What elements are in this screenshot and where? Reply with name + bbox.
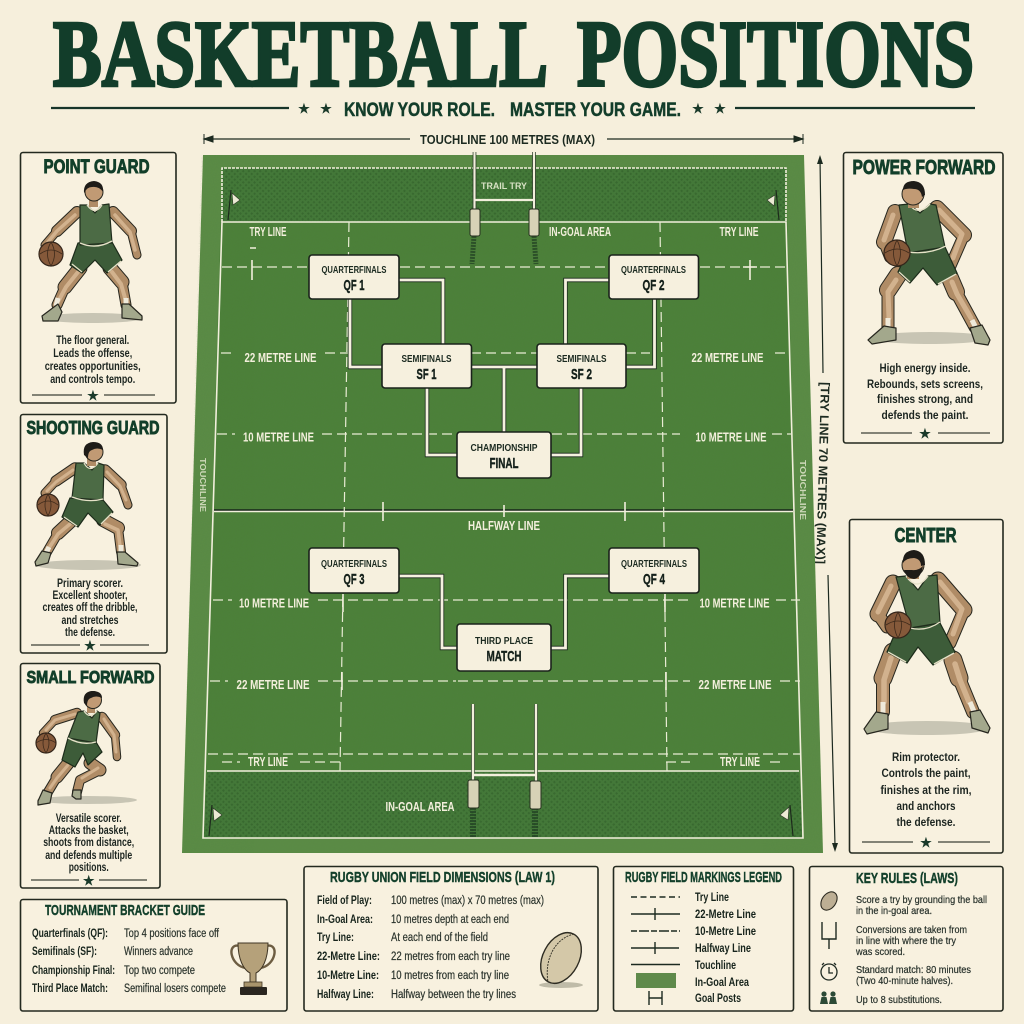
player figure: shooting guard: [35, 442, 141, 570]
panel: tournament bracket guide: Quarterfinals (QF):: [32, 928, 108, 940]
panel: key rules: Up to 8 substitutions.: [856, 994, 942, 1006]
panel: point guard: ★: [87, 388, 99, 403]
bracket box: QF 2: [609, 255, 698, 299]
panel: rugby union field dimensions: [304, 866, 598, 1011]
panel: small forward: Attacks the basket,: [49, 823, 129, 837]
panel: rugby union field dimensions: 10 metres from each try line: [391, 970, 509, 982]
panel: point guard: [20, 152, 176, 403]
panel: shooting guard: and stretches: [62, 613, 119, 627]
field labels: TRY LINE: [720, 755, 760, 769]
panel: rugby union field dimensions: Halfway Line:: [317, 989, 374, 1001]
panel: tournament bracket guide: Winners advance: [124, 946, 193, 958]
panel: center: ★: [920, 835, 932, 850]
panel: center: and anchors: [896, 799, 956, 813]
panel: small forward: and defends multiple: [45, 848, 132, 862]
bracket connectors: [350, 280, 654, 648]
field labels: 22 METRE LINE: [698, 678, 772, 692]
panel: point guard: creates opportunities,: [45, 359, 141, 373]
field labels: 10 METRE LINE: [700, 596, 770, 610]
in-goal area top: [222, 168, 786, 222]
panel: rugby union field dimensions: 100 metres (max) x 70 metres (max): [391, 895, 544, 907]
panel: rugby union field dimensions: Try Line:: [317, 932, 354, 944]
bracket box: Championship Final: CHAMPIONSHIP: [470, 442, 538, 454]
panel: small forward: shoots from distance,: [43, 835, 134, 849]
bracket box: Championship Final: [457, 432, 551, 478]
field labels: TOUCHLINE: [198, 458, 207, 513]
panel: center: [850, 520, 1003, 853]
touchline dimension arrow: [204, 132, 803, 147]
top goal posts: [470, 152, 539, 264]
panel: power forward: Rebounds, sets screens,: [867, 377, 983, 391]
panel: key rules: (Two 40-minute halves).: [856, 975, 953, 987]
bracket box: QF 2: QUARTERFINALS: [621, 264, 686, 276]
bracket box: QF 4: QF 4: [643, 571, 665, 588]
bracket box: Third Place Match: [457, 624, 551, 671]
top goal posts: TRAIL TRY: [481, 181, 527, 191]
panel: key rules: in line with where the try: [856, 935, 957, 947]
panel: shooting guard: Primary scorer.: [57, 576, 123, 590]
panel: point guard: The floor general.: [56, 333, 129, 347]
panel: power forward: High energy inside.: [880, 361, 970, 375]
panel: small forward: Versatile scorer.: [56, 811, 122, 825]
panel: rugby union field dimensions: 22 metres from each try line: [391, 951, 510, 963]
panel: center: the defense.: [896, 815, 956, 829]
bracket box: SF 1: SEMIFINALS: [402, 353, 452, 365]
title: [53, 2, 974, 106]
subtitle tagline: ★: [298, 101, 310, 116]
bracket box: QF 1: QF 1: [344, 277, 364, 294]
panel: point guard: Leads the offense,: [53, 346, 132, 360]
panel: power forward: [844, 152, 1003, 443]
panel: rugby union field dimensions: Field of Play:: [317, 895, 372, 907]
panel: rugby union field dimensions: At each end of the field: [391, 932, 488, 944]
panel: field markings legend: 10-Metre Line: [695, 926, 756, 938]
panel: field markings legend: [614, 866, 794, 1011]
player figure: center: [864, 550, 990, 735]
bracket box: QF 3: [309, 548, 399, 593]
panel: key rules: [810, 866, 1003, 1011]
field labels: TRY LINE: [720, 225, 758, 239]
subtitle tagline: KNOW YOUR ROLE.: [344, 100, 495, 121]
panel: center: CENTER: [894, 525, 957, 547]
panel: shooting guard: [20, 414, 167, 653]
field labels: TRY LINE: [250, 225, 286, 239]
field labels: [198, 225, 807, 814]
panel: small forward: [20, 664, 160, 888]
panel: point guard: POINT GUARD: [44, 157, 150, 178]
field labels: TOUCHLINE: [798, 460, 807, 521]
panel: rugby union field dimensions: 10 metres depth at each end: [391, 914, 509, 926]
bracket box: QF 2: QF 2: [642, 277, 664, 294]
field labels: 22 METRE LINE: [244, 351, 316, 365]
field lines: [203, 168, 803, 838]
panel: key rules: Standard match: 80 minutes: [856, 964, 971, 976]
rugby field: [182, 152, 823, 853]
panel: key rules: was scored.: [855, 946, 905, 958]
bracket box: QF 1: [309, 255, 399, 299]
panel: small forward: SMALL FORWARD: [26, 667, 154, 687]
panel: field markings legend: RUGBY FIELD MARKINGS LEGEND: [625, 870, 782, 886]
bracket box: QF 1: QUARTERFINALS: [322, 264, 386, 276]
bracket box: Third Place Match: THIRD PLACE: [475, 635, 533, 647]
icon: trophy: [231, 943, 275, 995]
panel: field markings legend: Goal Posts: [695, 993, 741, 1005]
icon: players: [820, 991, 837, 1004]
panel: power forward: finishes strong, and: [877, 392, 973, 406]
subtitle tagline: ★: [320, 101, 332, 116]
panel: field markings legend: Touchline: [695, 960, 736, 972]
subtitle tagline: ★: [714, 101, 726, 116]
panel: center: finishes at the rim,: [880, 783, 972, 797]
bracket box: Championship Final: FINAL: [490, 455, 518, 472]
width dimension arrow: [TRY LINE 70 METRES (MAX)]: [813, 382, 832, 564]
panel: tournament bracket guide: Third Place Match:: [32, 983, 108, 995]
panel: tournament bracket guide: Semifinal losers compete: [124, 983, 226, 995]
panel: power forward: defends the paint.: [882, 408, 968, 422]
in-goal area bottom: [203, 771, 803, 838]
bracket box: SF 2: SEMIFINALS: [556, 353, 606, 365]
icon: ball: [818, 889, 840, 913]
panel: shooting guard: SHOOTING GUARD: [26, 418, 160, 438]
player figure: power forward: [868, 181, 990, 345]
bracket box: SF 1: SF 1: [416, 366, 436, 383]
title: BASKETBALL: [53, 2, 548, 106]
bracket box: Third Place Match: MATCH: [486, 648, 522, 665]
bracket box: QF 3: QF 3: [344, 571, 364, 588]
panel: shooting guard: the defense.: [65, 625, 115, 639]
panel: rugby union field dimensions: RUGBY UNION FIELD DIMENSIONS (LAW 1): [330, 870, 555, 886]
panel: point guard: and controls tempo.: [50, 372, 135, 386]
panel: tournament bracket guide: TOURNAMENT BRACKET GUIDE: [45, 903, 205, 919]
panel: rugby union field dimensions: 22-Metre Line:: [317, 951, 380, 963]
legend swatches: [631, 897, 680, 1005]
field labels: IN-GOAL AREA: [549, 225, 611, 239]
panel: center: Controls the paint,: [882, 766, 970, 780]
field labels: 10 METRE LINE: [243, 430, 314, 444]
player figure: small forward: [36, 691, 137, 805]
field labels: IN-GOAL AREA: [386, 800, 454, 814]
touchline dimension arrow: TOUCHLINE 100 METRES (MAX): [420, 132, 595, 147]
panel: tournament bracket guide: Top 4 positions face off: [124, 928, 220, 940]
player figure: point guard: [39, 181, 143, 323]
subtitle tagline: MASTER YOUR GAME.: [510, 100, 681, 121]
icon: rugby ball: [532, 926, 590, 990]
panel: tournament bracket guide: Top two compete: [124, 965, 195, 977]
panel: shooting guard: Excellent shooter,: [52, 588, 128, 602]
panel: key rules: in the in-goal area.: [856, 905, 932, 917]
panel: key rules: KEY RULES (LAWS): [856, 871, 958, 887]
bracket box: QF 4: [609, 548, 699, 593]
panel: field markings legend: Halfway Line: [695, 943, 751, 955]
panel: tournament bracket guide: [20, 900, 287, 1011]
panel: rugby union field dimensions: 10-Metre Line:: [317, 970, 379, 982]
panel: power forward: ★: [919, 426, 931, 441]
panel: field markings legend: 22-Metre Line: [695, 909, 756, 921]
corner flags: [209, 190, 793, 836]
panel: small forward: ★: [83, 873, 95, 888]
bracket box: SF 2: SF 2: [571, 366, 592, 383]
panel: tournament bracket guide: Semifinals (SF):: [32, 946, 97, 958]
field labels: 10 METRE LINE: [696, 430, 766, 444]
field labels: TRY LINE: [248, 755, 288, 769]
panel: key rules: Conversions are taken from: [856, 924, 967, 936]
panel: key rules: Score a try by grounding the ball: [856, 894, 987, 906]
panel: rugby union field dimensions: In-Goal Area:: [317, 914, 373, 926]
width dimension arrow: [813, 155, 838, 852]
panel: shooting guard: ★: [84, 638, 96, 653]
subtitle tagline: ★: [692, 101, 704, 116]
panel: field markings legend: In-Goal Area: [695, 977, 749, 989]
field labels: 22 METRE LINE: [692, 351, 764, 365]
panel: field markings legend: Try Line: [695, 892, 729, 904]
bracket box: QF 4: QUARTERFINALS: [621, 558, 687, 570]
field labels: 22 METRE LINE: [236, 678, 310, 692]
field labels: 10 METRE LINE: [239, 596, 309, 610]
field labels: HALFWAY LINE: [468, 519, 540, 533]
panel: center: Rim protector.: [892, 750, 960, 764]
panel: rugby union field dimensions: Halfway between the try lines: [391, 989, 516, 1001]
bottom goal posts: [468, 704, 541, 838]
panel: shooting guard: creates off the dribble,: [42, 600, 138, 614]
panel: small forward: positions.: [69, 860, 109, 874]
bracket box: SF 1: [382, 344, 472, 388]
bracket box: SF 2: [537, 344, 626, 388]
panel: tournament bracket guide: Championship Final:: [32, 965, 115, 977]
icon: stopwatch: [821, 963, 837, 980]
subtitle tagline: [51, 100, 975, 121]
icon: goal posts: [822, 922, 836, 949]
bracket box: QF 3: QUARTERFINALS: [321, 558, 387, 570]
